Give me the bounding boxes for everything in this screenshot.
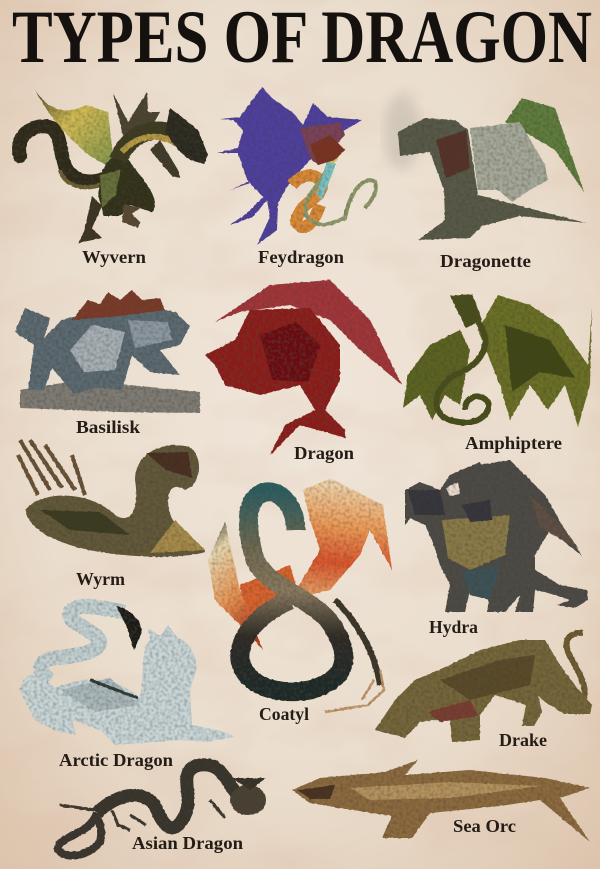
dragon: dragonette	[384, 94, 586, 240]
label: feydragon: Feydragon	[258, 247, 344, 267]
label: wyvern: Wyvern	[82, 247, 146, 267]
label: basilisk: Basilisk	[76, 417, 140, 437]
label: wyrm: Wyrm	[76, 569, 125, 589]
dragon: basilisk	[15, 290, 200, 413]
dragon: wyrm	[18, 440, 205, 557]
label: amphiptere: Amphiptere	[465, 433, 562, 453]
dragon: hydra	[405, 460, 588, 612]
label: sea orc: Sea Orc	[453, 816, 516, 836]
dragon: coatyl	[208, 478, 392, 712]
dragon: arctic dragon	[20, 606, 234, 745]
dragon: drake	[375, 633, 592, 742]
dragon: wyvern	[19, 90, 208, 243]
label: coatyl: Coatyl	[259, 704, 309, 724]
dragon: red dragon	[205, 280, 402, 455]
label: drake: Drake	[499, 730, 547, 750]
label: dragonette: Dragonette	[440, 251, 531, 271]
label: hydra: Hydra	[429, 617, 478, 637]
label: asian dragon: Asian Dragon	[132, 833, 243, 853]
dragon: feydragon	[217, 87, 376, 245]
dragon: asian dragon	[58, 765, 266, 856]
dragon: amphiptere	[403, 294, 592, 427]
label: arctic dragon: Arctic Dragon	[59, 750, 173, 770]
dragon: sea orc	[292, 760, 590, 842]
label: dragon: Dragon	[294, 443, 354, 463]
